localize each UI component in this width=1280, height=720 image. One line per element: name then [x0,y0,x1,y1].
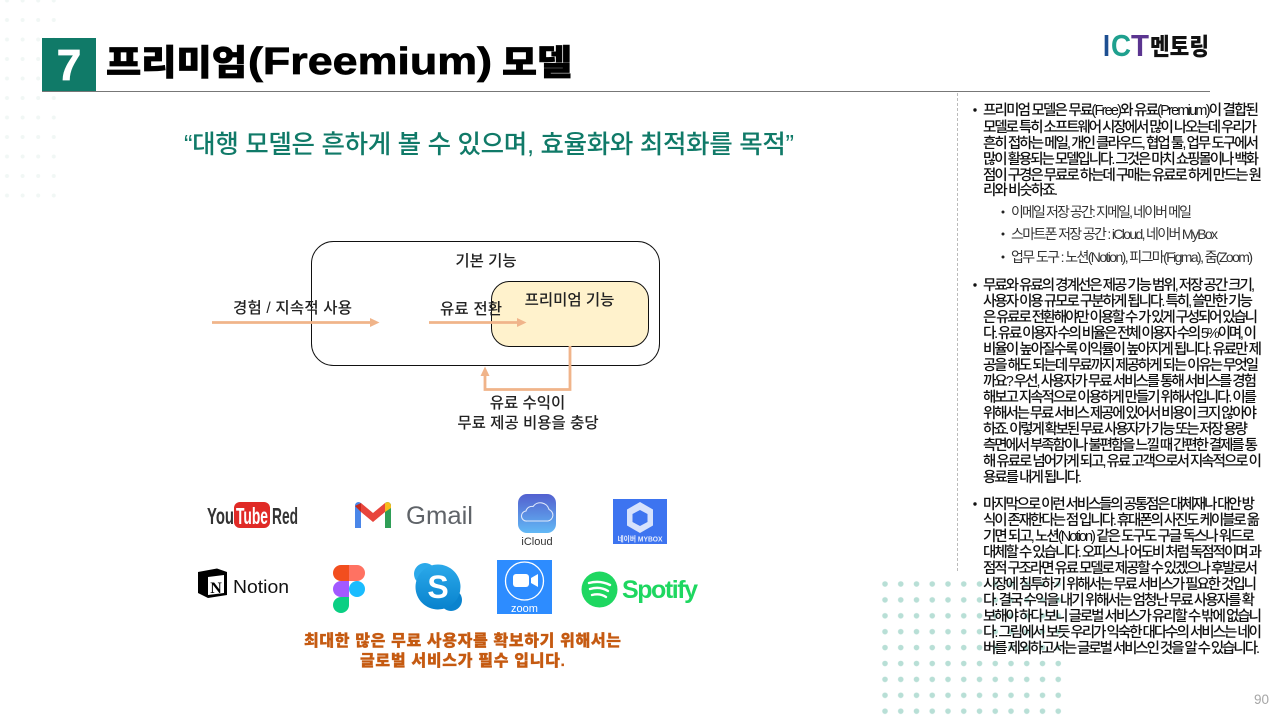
label: basic features: 기본 기능 [455,252,517,270]
callout: global services needed: 글로벌 서비스가 필수 입니다. [360,652,565,670]
logo: Gmail: Gmail [406,502,473,530]
section number badge [42,38,96,91]
logo: YouTube Red: Tube [236,503,268,529]
logo: ICT mentoring: T [1131,28,1149,63]
text block: paragraph 1: 리와 비슷하죠. [983,182,1058,199]
text block: paragraph 3 [973,496,1262,657]
column divider [956,93,958,571]
text block: paragraph 2: 비율이 높아질수록 이익률이 높아지게 됩니다. 유료만 제 [983,341,1262,358]
title rule [42,90,1210,92]
logo: Skype: S [427,569,449,605]
label: experience and continued use: 경험 / 지속적 사용 [233,299,352,317]
label: covers free cost: 무료 제공 비용을 충당 [457,414,599,432]
label: premium features: 프리미엄 기능 [525,291,614,309]
text block: paragraph 1 [973,102,1262,199]
label: paid conversion: 유료 전환 [440,300,502,318]
logo: iCloud: iCloud [521,536,553,548]
text block: paragraph 1: 점이 구경은 무료로 하는데 구매는 유료로 하게 만드는 원 [983,167,1262,184]
title [106,41,572,83]
text block: examples list: 업무 도구 : 노션(Notion), 피그마(Figma), 줌(Zoom) [1011,249,1253,265]
text block: paragraph 3: 대체할 수 있습니다. 오피스나 어도비 처럼 독점적이며 과 [983,544,1262,561]
background dots: bottom right [877,576,1066,719]
text block: paragraph 3: 기면 되고, 노션(Notion) 같은 도구도 구글 독스나 워드로 [983,528,1255,545]
text block: examples list: 이메일 저장 공간: 지메일, 네이버 메일 [1011,204,1192,220]
text block: paragraph 1: 흔히 접하는 메일, 개인 클라우드, 협업 툴, 업무 도구에서 [983,135,1259,152]
logo: YouTube Red: Red [272,503,298,529]
title: 모델 [502,44,572,83]
panel: premium features [492,282,648,346]
text block: paragraph 2: 하죠. 이렇게 확보된 무료 사용자가 기능 또는 저장 용량 [983,421,1248,438]
logo: ICT mentoring: C [1111,28,1131,63]
background dots: top left [0,0,60,200]
logo: Notion: N [210,580,222,597]
text block: paragraph 2: 측면에서 부족함이나 불편함을 느낄 때 간편한 결제를 통 [983,437,1258,454]
logo: Skype [414,563,462,611]
text block: paragraph 3: 마지막으로 이런 서비스들의 공통점은 대체재나 대안 방 [983,496,1255,513]
page number: 90 [1254,692,1269,707]
title: (Freemium) [248,41,492,83]
logo: Notion: Notion [233,577,289,597]
logo: ICT mentoring: 멘토링 [1150,34,1209,61]
logo: ICT mentoring: I [1103,28,1110,63]
arrowhead: revenue feedback [480,366,490,376]
text block: paragraph 3: 식이 존재한다는 점 입니다. 휴대폰의 사진도 케이블로 옮 [983,512,1260,529]
text block: paragraph 3: 보해야 하다 보니 글로벌 서비스가 유리할 수 밖에 없습니 [983,608,1262,625]
title: 프리미엄 [106,44,247,83]
text block: paragraph 2: 해 유료로 넘어가게 되고, 유료 고객으로서 지속적으로 이 [983,453,1262,470]
logo: YouTube Red: You [207,503,234,529]
text block: paragraph 2: 위해서는 무료 서비스 제공에 있어서 비용이 크지 않아야 [983,405,1257,422]
arrow: experience [212,321,372,324]
text block: paragraph 2: 다. 유료 이용자 수의 비율은 전체 이용자 수의 5%이며, 이 [983,325,1257,342]
text block: paragraph 1: 많이 활용되는 모델입니다. 그것은 마치 쇼핑몰이나 백화 [983,151,1259,168]
arrow: revenue feedback [485,346,570,390]
callout: global services needed [304,631,621,670]
text block: paragraph 2: 은 유료로 전환해야만 이용할 수 가 있게 구성되어 있습니 [983,309,1258,326]
logo: Naver MyBox: 네이버 MYBOX [618,534,662,544]
arrow: paid conversion [429,321,519,324]
text block: paragraph 2: 무료와 유료의 경계선은 제공 기능 범위, 저장 공간 크기, [983,277,1255,294]
label: paid revenue: 유료 수익이 [490,394,565,412]
logo: Zoom: zoom [511,603,538,615]
subtitle quote: “대행 모델은 흔하게 볼 수 있으며, 효율화와 최적화를 목적” [184,131,794,159]
logo: Naver MyBox [613,499,667,544]
section number badge: 7 [57,41,81,90]
logo: iCloud [518,494,556,548]
text block: paragraph 2 [973,277,1262,486]
text block: paragraph 1: 모델로 특히 소프트웨어 시장에서 많이 나오는데 우리가 [983,119,1257,136]
text block: paragraph 3: 다. 그림에서 보듯 우리가 익숙한 대다수의 서비스는 네이 [983,624,1262,641]
logo: YouTube Red [207,502,298,529]
text block: paragraph 3: 다. 결국 수익을 내기 위해서는 엄청난 무료 사용자를 확 [983,592,1255,609]
logo: Gmail [355,502,473,530]
text block: paragraph 2: 해보고 지속적으로 이용하게 만들기 위해서입니다. 이를 [983,389,1257,406]
diagram: freemium flow [212,242,660,432]
callout: global services needed: 최대한 많은 무료 사용자를 확보하기 위해서는 [304,631,621,650]
text block: examples list: 스마트폰 저장 공간 : iCloud, 네이버 MyBox [1011,226,1218,242]
text block: paragraph 2: 까요? 우선, 사용자가 무료 서비스를 통해 서비스를 경험 [983,373,1257,390]
logo: Spotify [582,572,698,608]
logo: Figma [333,565,365,613]
text block: paragraph 1: 프리미엄 모델은 무료(Free)와 유료(Premium)이 결합된 [983,102,1259,119]
text block: examples list [1002,204,1253,265]
text block: paragraph 3: 버를 제외하고서는 글로벌 서비스인 것을 알 수 있습니다. [983,640,1260,657]
logo: Notion [198,568,289,598]
panel: basic features [312,242,660,366]
arrowhead: experience [370,318,380,327]
logo: ICT mentoring [1103,28,1209,63]
text block: paragraph 2: 공을 해도 되는데 무료까지 제공하게 되는 이유는 무엇일 [983,357,1259,374]
text block: paragraph 2: 용료를 내게 됩니다. [983,469,1082,486]
text block: paragraph 3: 시장에 침투하기 위해서는 무료 서비스가 필요한 것입니 [983,576,1257,593]
logo: Spotify: Spotify [622,576,698,604]
logo: Zoom [497,560,552,615]
text block: paragraph 3: 점적 구조라면 유료 모델로 제공할 수 있겠으나 후발로서 [983,560,1258,577]
text block: paragraph 2: 사용자 이용 규모로 구분하게 됩니다. 특히, 쓸만한 기능 [983,293,1253,310]
arrowhead: paid conversion [517,318,526,327]
